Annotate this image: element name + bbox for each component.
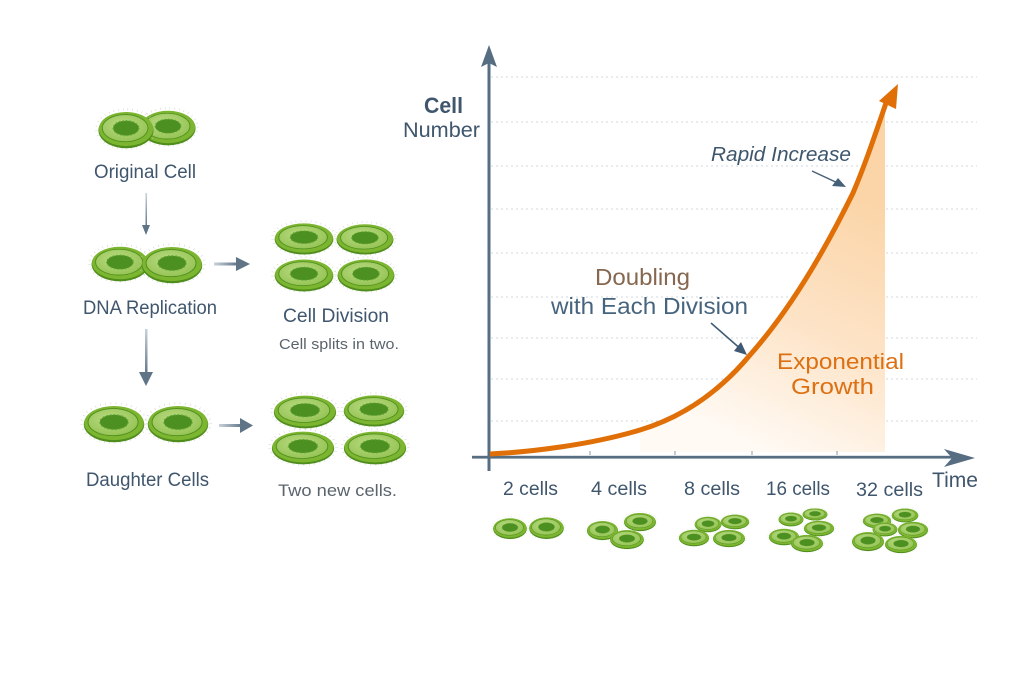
arrow: daughter to new cells — [219, 418, 253, 433]
label: DNA replication: DNA Replication — [83, 298, 217, 319]
label: original cell: Original Cell — [94, 162, 196, 183]
cluster: 8 cells — [678, 514, 750, 547]
exponential curve arrow — [490, 84, 898, 454]
cluster: 32 cells — [851, 508, 929, 553]
arrow: original to replication — [142, 193, 150, 235]
annotation: doubling: Doubling — [595, 264, 690, 290]
grid lines — [491, 77, 977, 421]
panel: cell division process — [81, 108, 409, 500]
time labels: 8 cells — [684, 479, 740, 500]
label: daughter cells: Daughter Cells — [86, 470, 209, 491]
time labels: 16 cells — [766, 479, 830, 500]
caption: cell splits: Cell splits in two. — [279, 336, 399, 353]
time labels: 2 cells — [503, 479, 558, 500]
label: exponential growth: Growth — [791, 374, 874, 399]
icon: daughter cells — [81, 403, 211, 443]
label: exponential growth: Exponential — [777, 349, 904, 374]
time labels: 32 cells — [856, 480, 923, 501]
x axis — [472, 449, 975, 467]
label: cell division: Cell Division — [283, 306, 389, 327]
arrow: replication to daughter — [139, 329, 153, 386]
caption: two new cells: Two new cells. — [278, 481, 397, 500]
y axis — [481, 45, 497, 471]
time labels: 4 cells — [591, 479, 647, 500]
y axis label: Number — [403, 119, 480, 142]
y axis label: Cell — [424, 93, 463, 118]
y axis label — [403, 93, 480, 142]
shaded area under curve — [640, 112, 885, 452]
annotation: doubling — [550, 264, 748, 355]
icon: DNA replication cells — [89, 244, 205, 284]
annotation: rapid increase: Rapid Increase — [711, 144, 851, 166]
label: exponential growth — [777, 349, 904, 399]
icon: new cells — [269, 393, 409, 465]
cluster: 2 cells — [492, 516, 565, 539]
time labels — [503, 479, 923, 501]
chart: cell number over time — [403, 45, 978, 553]
cell clusters row — [492, 507, 929, 553]
annotation: rapid increase — [711, 144, 851, 187]
x axis label: Time — [932, 469, 978, 492]
icon: original cell — [96, 108, 198, 149]
arrow: replication to division — [214, 257, 250, 271]
icon: dividing cells — [272, 221, 397, 292]
annotation: doubling: with Each Division — [550, 293, 748, 319]
cluster: 16 cells — [768, 507, 835, 552]
cluster: 4 cells — [586, 512, 657, 549]
